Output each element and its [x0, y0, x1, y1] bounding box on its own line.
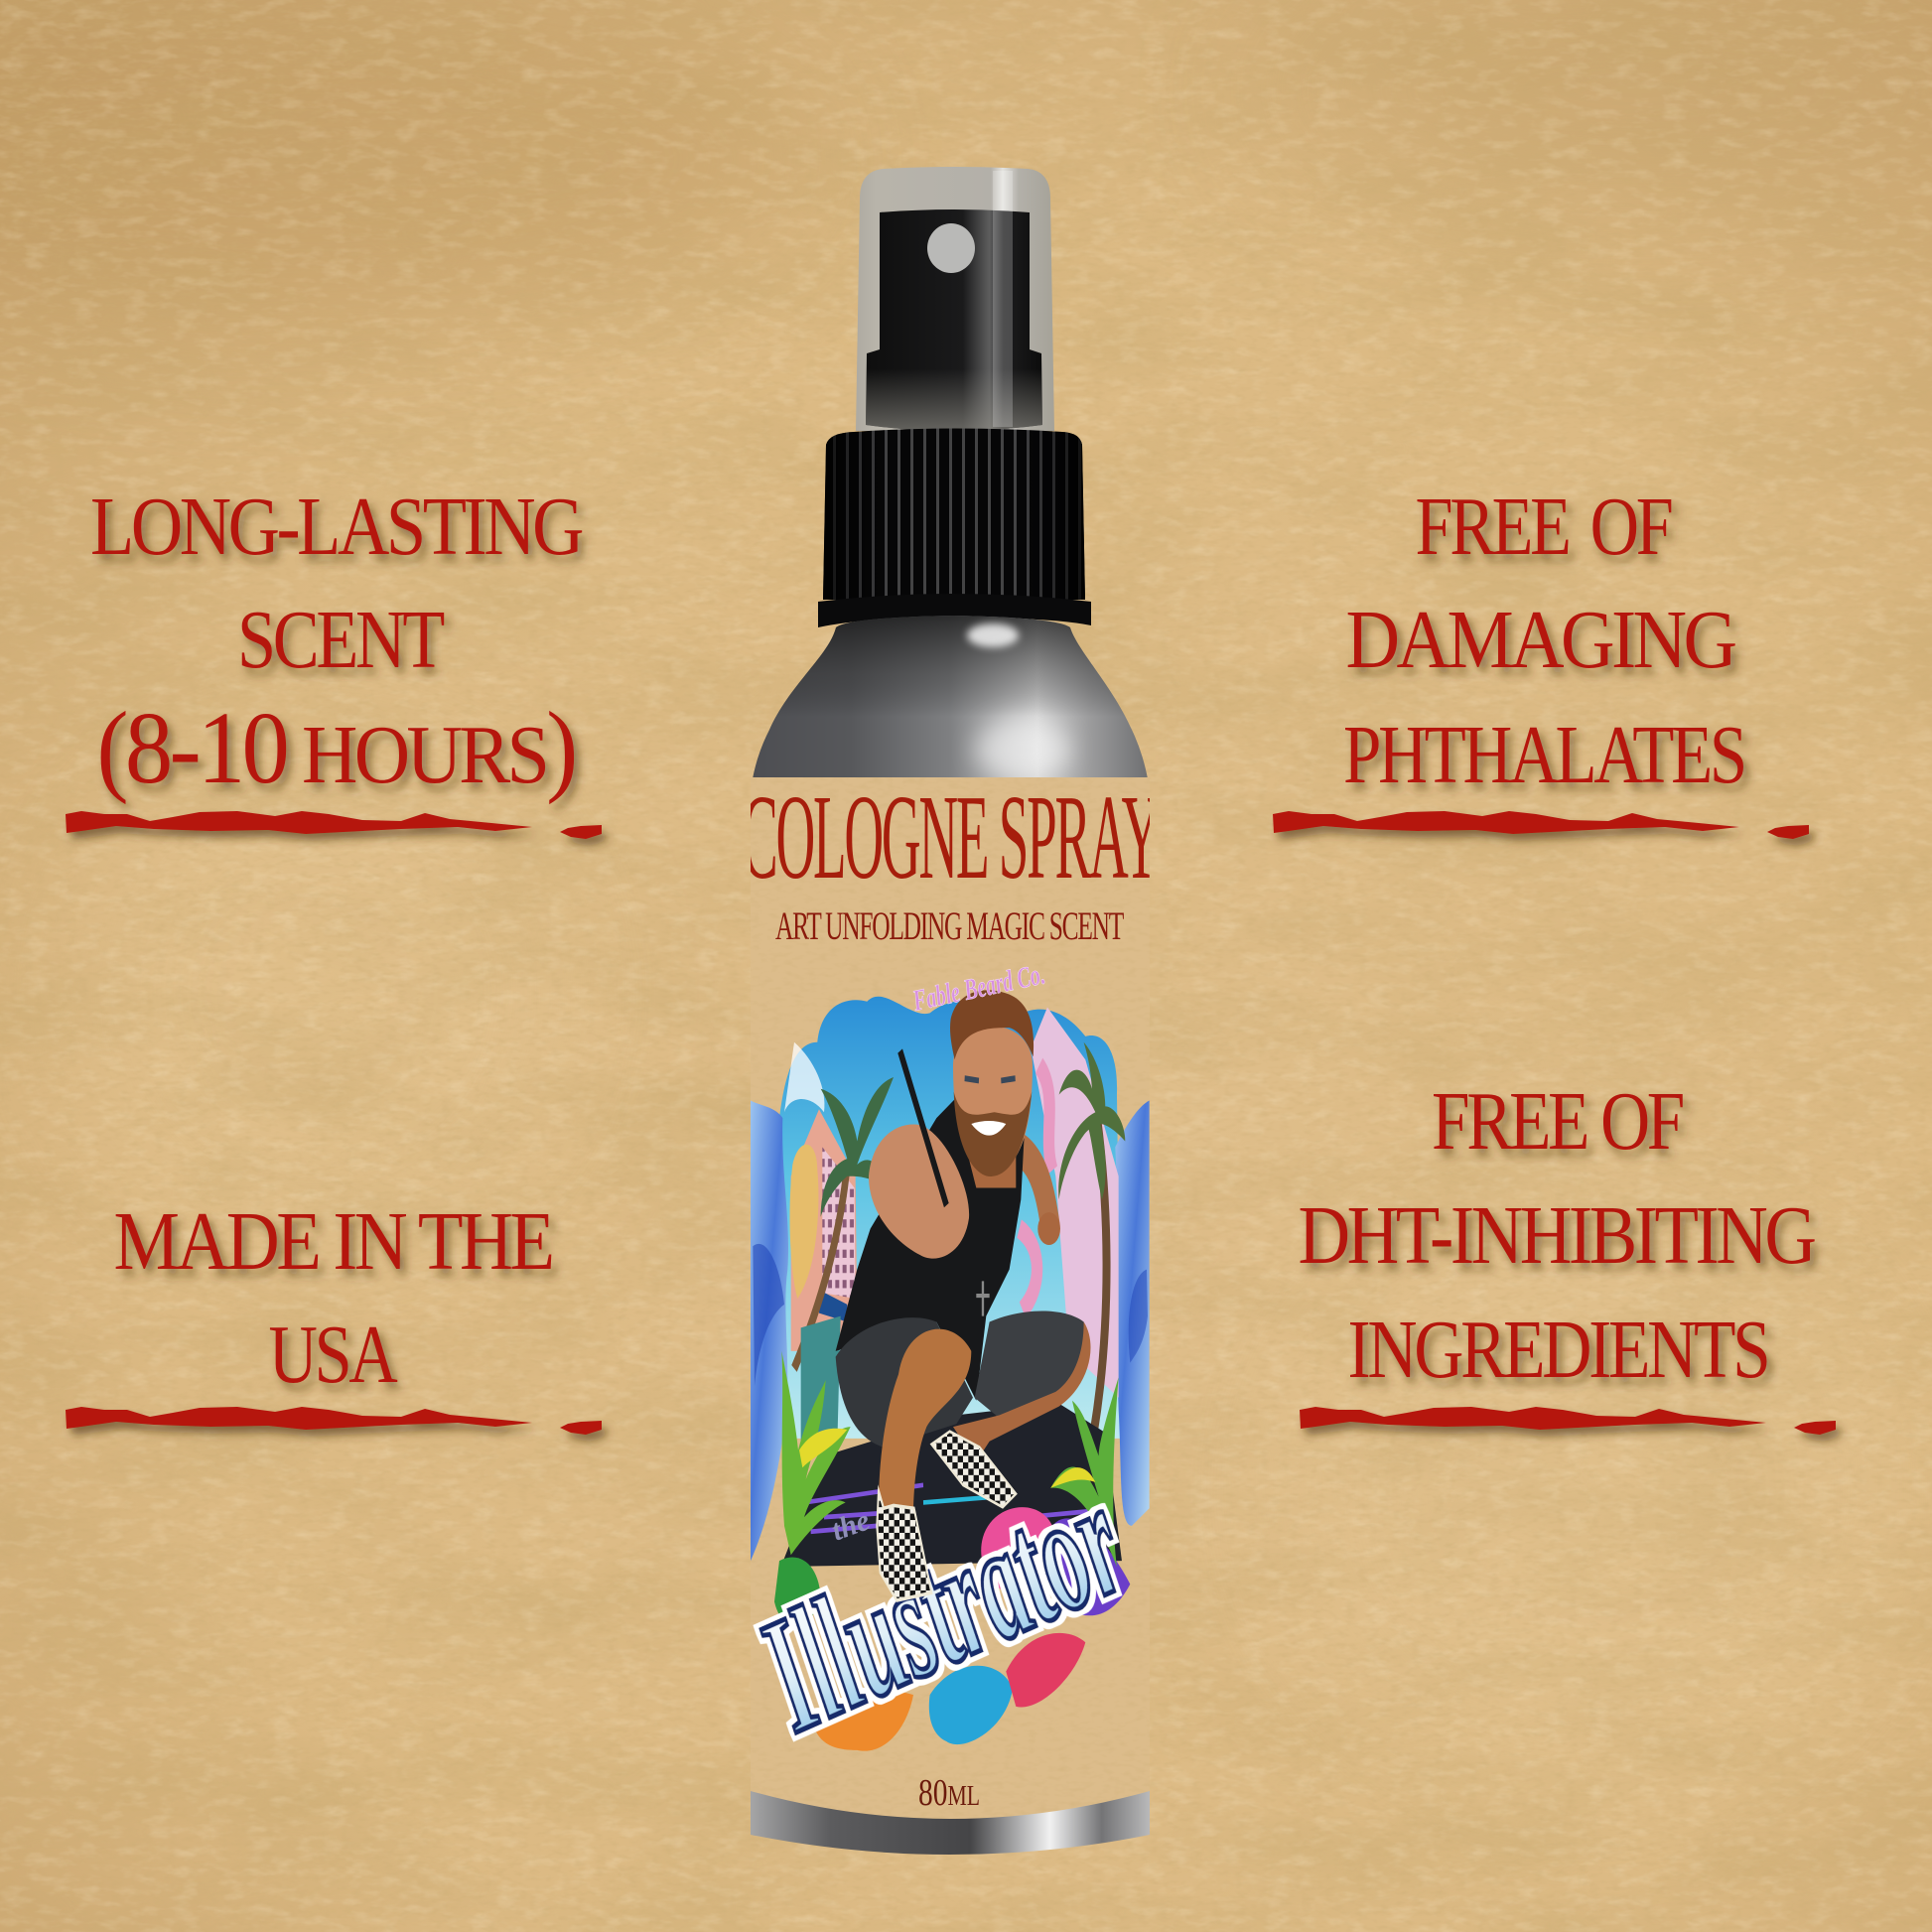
ribbed collar [818, 429, 1091, 627]
callout: free of damaging phthalates [1273, 481, 1809, 839]
left palm [794, 1077, 894, 1368]
neck [963, 1136, 1016, 1187]
heading line: usa: USA [268, 1309, 398, 1401]
volume text: 80ML [918, 1772, 980, 1814]
shirt [836, 1098, 1025, 1401]
sky backdrop [777, 997, 1122, 1439]
grass right [1050, 1377, 1119, 1567]
text: COLOGNE SPRAY [742, 770, 1160, 904]
underline [1273, 811, 1809, 839]
illustration text: the: the [827, 1503, 874, 1548]
aluminium shoulder [752, 616, 1149, 784]
beard [954, 1092, 1032, 1176]
low foliage and street [801, 1316, 841, 1445]
callout: free of dht-inhibiting ingredients [1299, 1075, 1836, 1435]
fist [869, 1125, 969, 1259]
heading line: phthalates: PHTHALATES [1343, 709, 1744, 801]
front leg [879, 1329, 971, 1517]
callout: long-lasting scent [66, 481, 602, 839]
spray nozzle [866, 209, 1042, 431]
hair [950, 990, 1034, 1059]
double sign [819, 1290, 847, 1321]
tentacle [1020, 1065, 1052, 1311]
splash orange [814, 1688, 913, 1751]
right building [1031, 1008, 1119, 1398]
road [781, 1404, 1122, 1567]
blonde figure [790, 1145, 818, 1299]
pen [900, 1051, 946, 1205]
back shoe [931, 1432, 1016, 1507]
underline [1300, 1407, 1836, 1435]
illustration: artist character [751, 990, 1150, 1751]
splash purple [1052, 1518, 1130, 1615]
heading line: dht-inhibiting: DHT-INHIBITING [1299, 1189, 1816, 1282]
front shoe [877, 1491, 931, 1600]
splash pink [981, 1507, 1053, 1590]
right calf [953, 1321, 1091, 1461]
illustration text: fable beard co: Fable Beard Co. [909, 958, 1048, 1018]
heading line: free of: FREE OF [1416, 481, 1672, 573]
grass left [781, 1351, 851, 1555]
heading line: long-lasting: LONG-LASTING [90, 481, 583, 573]
underline [66, 811, 602, 839]
shorts right [975, 1311, 1086, 1418]
heading line: free of: FREE OF [1432, 1075, 1683, 1168]
splash red [1006, 1633, 1085, 1707]
watercolor right [1115, 1100, 1150, 1526]
right palm [1058, 1042, 1125, 1433]
clear overcap [856, 167, 1054, 431]
label [736, 770, 1160, 1860]
nozzle orifice [927, 223, 975, 273]
underline [66, 1407, 602, 1435]
aluminium base [751, 1782, 1150, 1855]
splash green [774, 1557, 821, 1625]
label subtitle: ART UNFOLDING MAGIC SCENT [775, 903, 1124, 948]
head [953, 1027, 1033, 1173]
back fist [1037, 1212, 1060, 1245]
product: spray bottle [736, 167, 1160, 1860]
necklace pendant [976, 1281, 990, 1316]
heading line: ingredients: INGREDIENTS [1348, 1304, 1767, 1396]
eyes [965, 1078, 1016, 1081]
cloud [784, 1042, 825, 1112]
heading line: made in the: MADE IN THE [113, 1195, 552, 1288]
right arm [1016, 1147, 1050, 1229]
left building [791, 1109, 857, 1351]
splash blue [929, 1666, 1013, 1744]
smile [971, 1121, 1006, 1136]
heading line: scent: SCENT [237, 594, 444, 686]
shorts left [836, 1317, 973, 1448]
logo wordmark: Illustrator [736, 1449, 1150, 1766]
heading line: hours: (8-10 HOURS) [96, 691, 575, 805]
callout: made in the usa [66, 1195, 602, 1435]
heading line: damaging: DAMAGING [1346, 594, 1736, 686]
watercolor left [751, 1100, 788, 1561]
